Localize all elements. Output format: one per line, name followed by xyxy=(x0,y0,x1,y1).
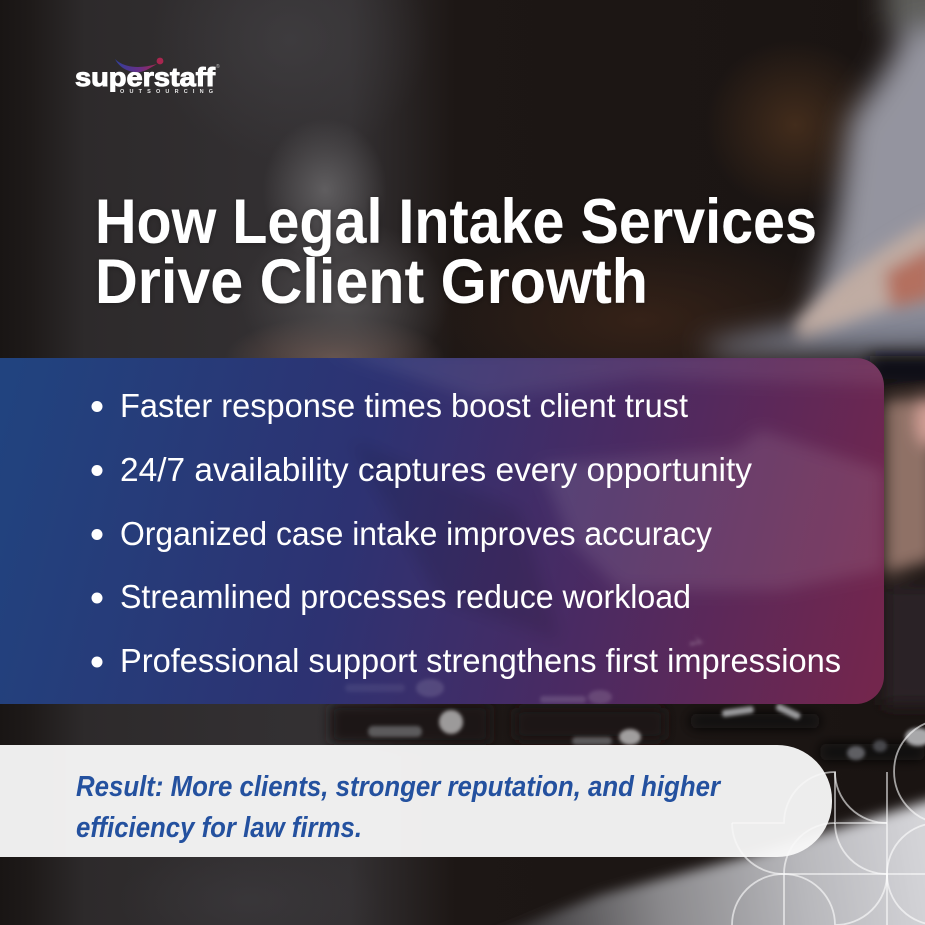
photo details: hand, window and keyboard xyxy=(330,0,925,925)
panel background xyxy=(0,358,884,704)
icon: logo dot xyxy=(157,58,163,64)
logo registered mark: ® xyxy=(216,63,220,70)
logo wordmark: superstaff xyxy=(75,62,215,92)
decorative line pattern xyxy=(732,720,925,925)
icon: logo swoosh xyxy=(115,59,157,72)
bullet 5: Professional support strengthens first impressions xyxy=(120,642,841,679)
callout background xyxy=(0,745,832,857)
title: Drive Client Growth xyxy=(95,247,648,317)
title xyxy=(95,187,817,317)
title: How Legal Intake Services xyxy=(95,187,817,257)
callout: result xyxy=(0,745,832,857)
logo: superstaff outsourcing xyxy=(75,58,220,95)
callout text xyxy=(76,771,722,844)
blurred hand seen through panel xyxy=(330,350,900,704)
panel: benefits list xyxy=(0,350,900,704)
callout text: Result: More clients, stronger reputation, and higher xyxy=(76,771,722,803)
bullet 1: Faster response times boost client trust xyxy=(120,387,688,424)
bullet 3: Organized case intake improves accuracy xyxy=(120,515,712,552)
callout text: efficiency for law firms. xyxy=(76,812,362,844)
bullet 2: 24/7 availability captures every opportunity xyxy=(120,451,752,488)
logo tagline: OUTSOURCING xyxy=(120,89,213,95)
bullet 4: Streamlined processes reduce workload xyxy=(120,578,691,615)
